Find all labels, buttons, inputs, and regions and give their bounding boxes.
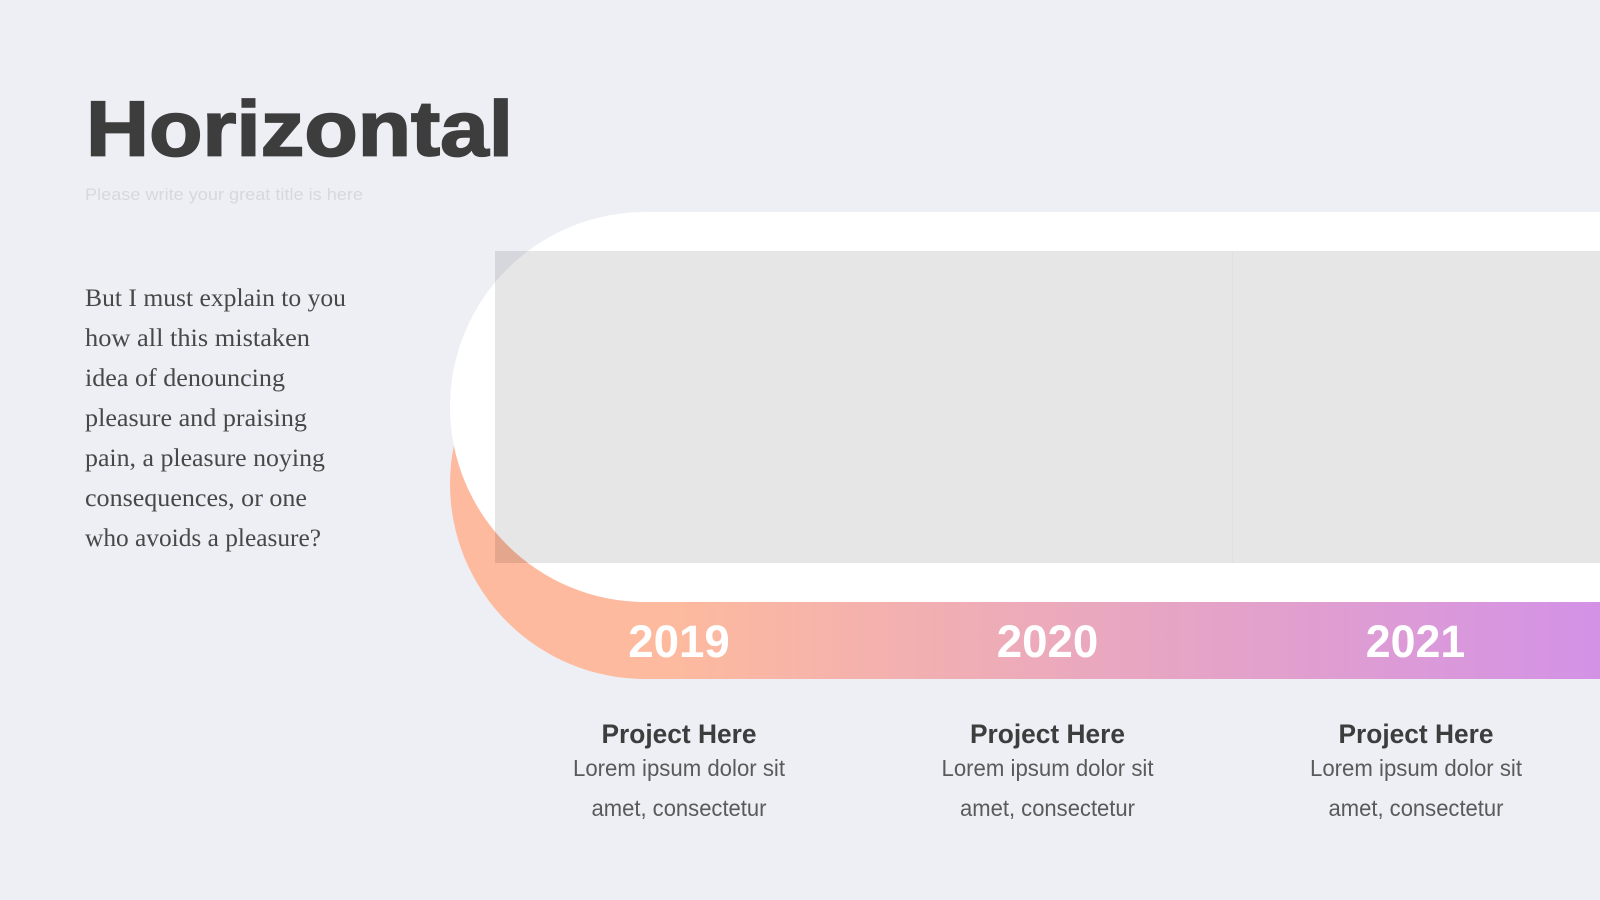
milestone 2021: Lorem ipsum dolor sit [1310,755,1523,781]
milestone 2020: Project Here [970,719,1125,749]
gradient timeline band [450,289,1600,679]
milestone 2019: Project Here [602,719,756,749]
body paragraph: pleasure and praising [85,405,308,432]
white rounded card [450,212,1600,602]
milestone 2019: amet, consectetur [592,795,767,821]
body paragraph: who avoids a pleasure? [85,525,321,552]
milestone 2021: Project Here [1338,719,1494,749]
milestone 2021: amet, consectetur [1328,795,1504,821]
title: Horizontal [86,84,513,172]
body paragraph: how all this mistaken [85,325,311,352]
milestone 2021 [1310,719,1523,821]
milestone 2020: amet, consectetur [960,795,1135,821]
body paragraph [85,285,346,552]
milestone 2020 [942,719,1154,821]
subtitle: Please write your great title is here [85,185,363,204]
year labels: 2020 [997,616,1098,667]
milestone 2020: Lorem ipsum dolor sit [942,755,1154,781]
body paragraph: pain, a pleasure noying [85,445,326,472]
year labels [628,616,1465,667]
milestone 2019: Lorem ipsum dolor sit [573,755,786,781]
image placeholder [495,251,1600,563]
year labels: 2021 [1366,616,1465,667]
body paragraph: But I must explain to you [85,285,346,312]
body paragraph: consequences, or one [85,485,307,512]
body paragraph: idea of denouncing [85,365,286,392]
milestone 2019 [573,719,786,821]
year labels: 2019 [628,616,730,667]
